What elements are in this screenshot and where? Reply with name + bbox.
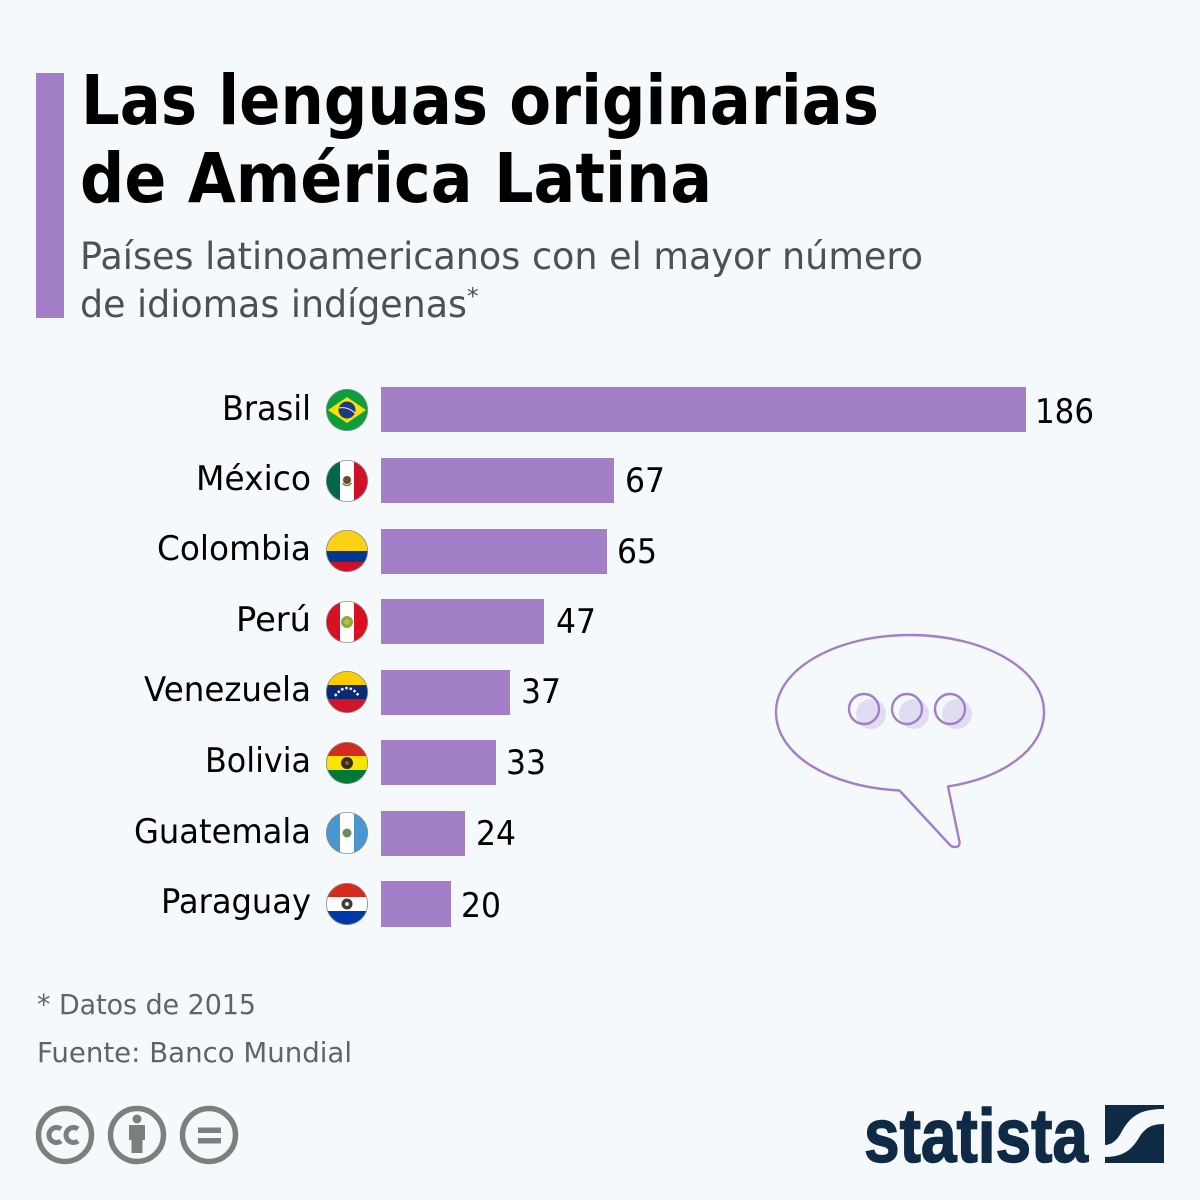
bar values: 37 [521, 672, 561, 712]
bar values: 20 [461, 886, 501, 926]
bar values: 33 [506, 743, 546, 783]
accent bar [36, 73, 64, 318]
title: de América Latina [80, 139, 712, 219]
subtitle: * [467, 284, 478, 310]
bar values [461, 392, 1094, 926]
title [80, 61, 879, 219]
country labels [134, 389, 311, 922]
icon: attribution [110, 1108, 164, 1162]
country labels: Perú [236, 600, 311, 640]
country labels: Brasil [222, 389, 311, 429]
icon: flag of Bolivia [326, 742, 368, 784]
icon: flag of Paraguay [326, 883, 368, 925]
icon: flag of Peru [326, 601, 368, 643]
title: Las lenguas originarias [81, 61, 879, 141]
bar chart [381, 387, 1026, 927]
bar values: 67 [625, 461, 665, 501]
source: Fuente: Banco Mundial [37, 1036, 352, 1069]
icon: speech bubble [776, 635, 1044, 847]
bar values: 24 [476, 814, 516, 854]
icon: flag of Venezuela [326, 671, 368, 713]
subtitle: Países latinoamericanos con el mayor número [80, 235, 923, 278]
subtitle [80, 235, 923, 326]
bar values: 47 [556, 602, 596, 642]
icon: creative commons [38, 1108, 92, 1162]
footnote: * Datos de 2015 [37, 988, 256, 1021]
icon: flag of Brazil [326, 389, 368, 431]
flag icons [326, 389, 368, 925]
icon: flag of Guatemala [326, 812, 368, 854]
icon: flag of Mexico [326, 460, 368, 502]
bar values: 186 [1035, 392, 1094, 432]
statista logo: statista [864, 1094, 1089, 1179]
country labels: México [196, 459, 311, 499]
country labels: Bolivia [205, 741, 311, 781]
country labels: Guatemala [134, 812, 311, 852]
icon: no derivatives [182, 1108, 236, 1162]
subtitle: de idiomas indígenas [80, 283, 467, 326]
bar values: 65 [617, 532, 657, 572]
country labels: Venezuela [144, 670, 311, 710]
country labels: Paraguay [161, 882, 311, 922]
icon: flag of Colombia [326, 530, 368, 572]
country labels: Colombia [157, 529, 311, 569]
